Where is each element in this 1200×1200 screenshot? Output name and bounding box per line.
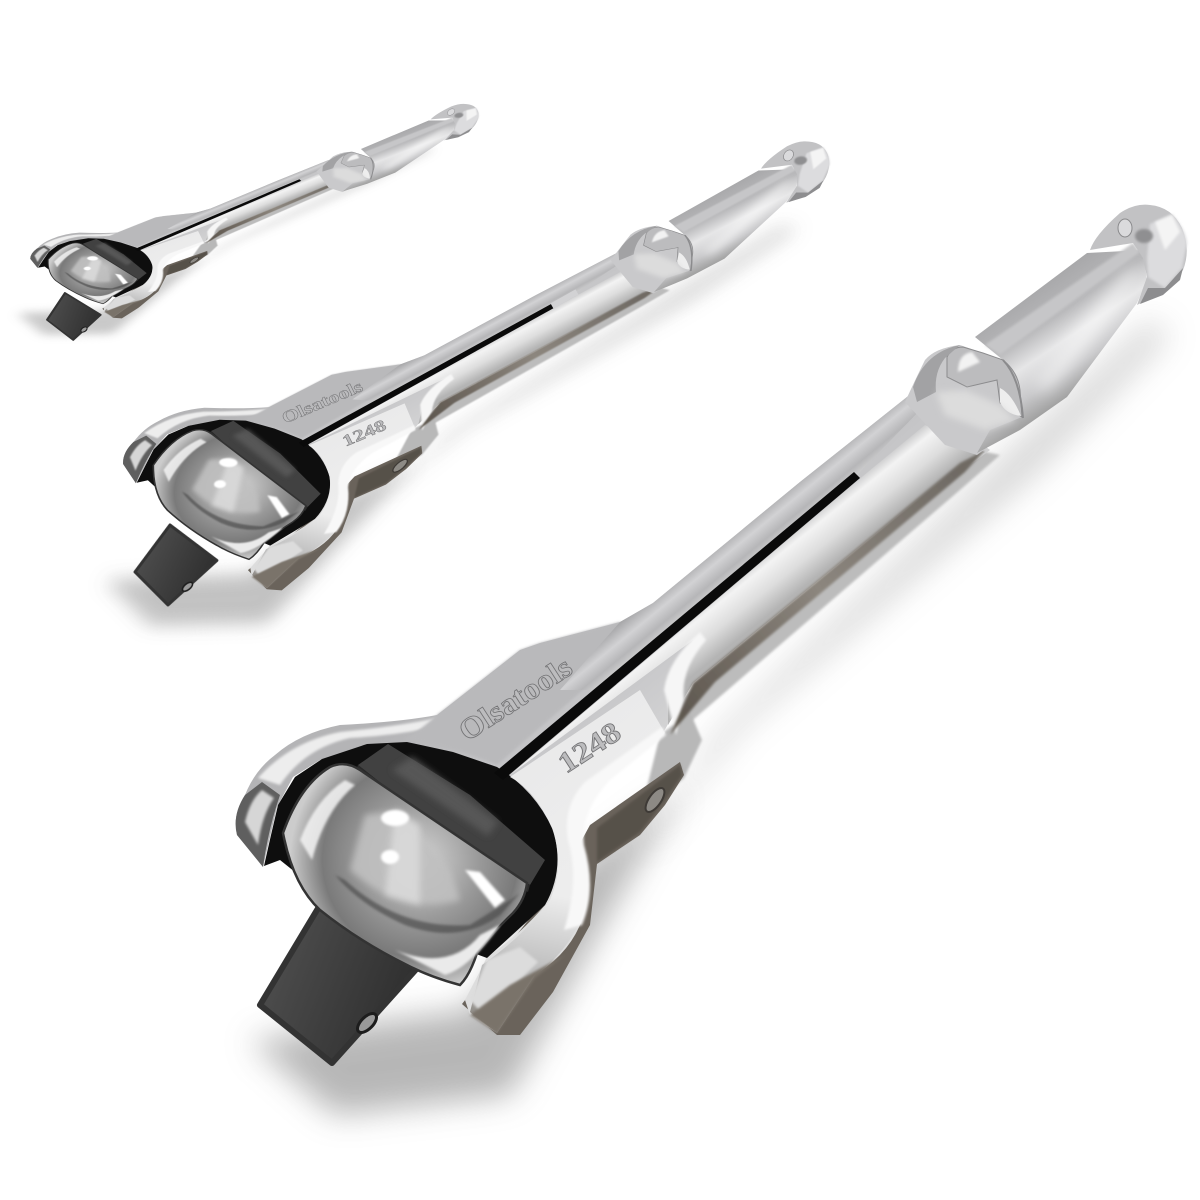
pawl	[355, 744, 545, 892]
large brand engraving: Olsatools	[453, 650, 578, 748]
head side and lower prong underside	[462, 762, 684, 1035]
bump socket	[913, 345, 1023, 430]
grip neck joint	[905, 345, 1023, 455]
head shadow	[250, 790, 680, 1115]
small ratchet shadow	[11, 124, 434, 356]
left prong detail	[236, 718, 437, 867]
medium model engraving: 1248	[339, 416, 389, 450]
grip and cap	[905, 205, 1187, 455]
medium ratchet head and neck	[96, 217, 678, 615]
slot	[494, 472, 860, 780]
cap pin	[1118, 219, 1132, 237]
small ratchet	[11, 99, 485, 356]
large model number: 1248	[552, 716, 627, 780]
arm to neck transition	[640, 712, 702, 815]
prong tip reflection	[470, 955, 565, 1033]
grip	[975, 243, 1147, 453]
large ratchet shadow	[250, 320, 1170, 1115]
medium ratchet grip	[603, 139, 835, 295]
small ratchet grip	[308, 99, 485, 196]
medium slot end cover	[552, 292, 577, 306]
neck underside mirror strip	[672, 450, 1000, 760]
right arm bright band	[564, 727, 666, 930]
medium ratchet shadow	[95, 176, 798, 668]
medium ratchet	[95, 139, 835, 668]
small square drive	[45, 290, 103, 343]
end cap	[1090, 205, 1187, 305]
head and neck silhouette	[236, 393, 990, 1033]
lower prong end	[470, 947, 538, 1028]
chrome dome	[283, 764, 527, 985]
head and neck	[236, 393, 1000, 1035]
square drive	[260, 905, 420, 1063]
small ratchet head and neck	[12, 143, 363, 330]
neck lower rail	[510, 425, 985, 775]
arm side reflection	[597, 765, 682, 862]
neck and grip shadow	[640, 320, 1170, 860]
neck upper rail	[560, 393, 925, 690]
opening interior	[264, 742, 558, 958]
dome reflections	[300, 780, 355, 860]
medium square drive	[132, 522, 220, 610]
large ratchet	[236, 205, 1187, 1063]
right arm tone	[470, 690, 665, 1033]
medium brand engraving: Olsatools	[279, 377, 366, 427]
side bolt	[642, 785, 668, 815]
shoulder chrome curve	[664, 632, 706, 735]
head shoulder shading	[405, 622, 640, 765]
neck dark reflection band	[670, 450, 985, 735]
detent ball	[354, 1010, 380, 1036]
